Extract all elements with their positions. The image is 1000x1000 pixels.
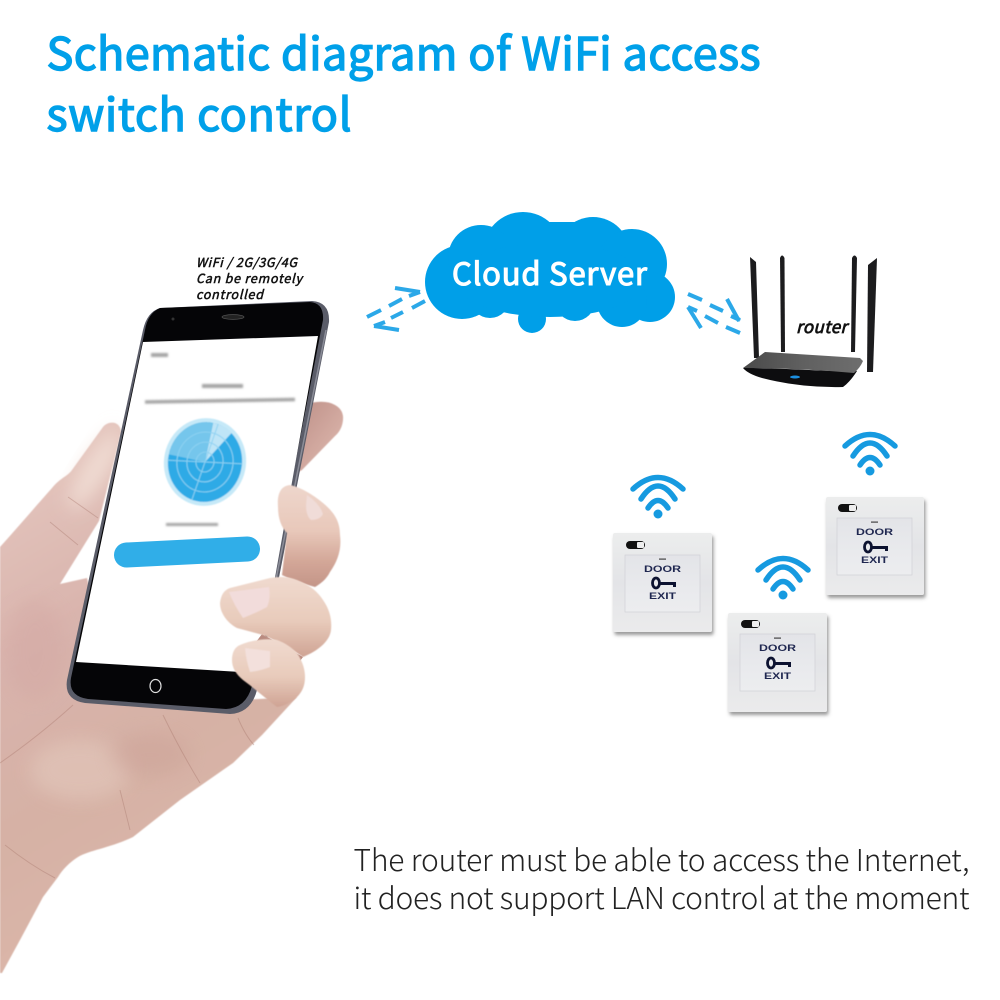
phone caption: Can be remotely <box>196 268 304 287</box>
note text: The router must be able to access the Internet, <box>354 836 970 880</box>
palm and wrist <box>0 423 297 973</box>
wifi signal 3 <box>845 434 895 476</box>
door exit switch 2: DOOR <box>759 643 796 654</box>
middle fingernail <box>306 495 323 520</box>
door exit switch 2: EXIT <box>764 671 792 681</box>
wifi signal 2 <box>758 558 808 600</box>
palm shading <box>5 425 190 800</box>
status light <box>790 376 800 378</box>
search button <box>114 536 260 568</box>
cloud label: Cloud Server <box>452 249 648 294</box>
home button <box>150 680 161 692</box>
door exit switch 3: DOOR <box>856 527 893 538</box>
radar graphic <box>156 410 254 514</box>
door exit switch 1: EXIT <box>649 591 677 601</box>
antennas <box>750 256 877 372</box>
middle finger <box>278 485 340 587</box>
hand holding phone <box>0 301 343 973</box>
cloud shape <box>425 212 675 333</box>
phone caption <box>196 252 304 303</box>
door exit switch 2 <box>728 613 827 712</box>
router label: router <box>796 313 849 338</box>
note text: it does not support LAN control at the moment <box>354 874 970 918</box>
router front <box>743 368 857 387</box>
door exit switch 3 <box>826 497 924 595</box>
arrows: phone to cloud <box>367 288 425 330</box>
ring fingernail <box>229 587 270 618</box>
door exit switch 1: DOOR <box>644 564 681 575</box>
phone <box>67 301 329 714</box>
phone side highlight <box>255 330 326 684</box>
speaker <box>222 315 244 319</box>
title: switch control <box>46 79 352 144</box>
phone caption: controlled <box>196 284 265 303</box>
little fingernail <box>245 648 270 672</box>
blurred screen text <box>145 353 295 526</box>
phone body <box>67 301 329 714</box>
cloud server <box>425 212 675 333</box>
arrows: cloud to router <box>688 294 740 333</box>
camera <box>172 318 174 320</box>
wifi signal 1 <box>633 478 683 518</box>
little finger <box>232 639 305 707</box>
screen <box>76 336 318 673</box>
back finger <box>285 402 343 480</box>
router top <box>743 352 863 373</box>
ring finger <box>220 577 331 657</box>
router <box>743 256 877 387</box>
door exit switch 1 <box>613 533 712 632</box>
title: Schematic diagram of WiFi access <box>46 18 760 83</box>
palm creases <box>0 497 254 878</box>
phone caption: WiFi / 2G/3G/4G <box>196 252 298 271</box>
thumb underside <box>250 634 303 672</box>
door exit switch 3: EXIT <box>861 555 889 565</box>
note text <box>354 836 970 918</box>
phone front <box>71 302 323 709</box>
title <box>46 18 760 144</box>
